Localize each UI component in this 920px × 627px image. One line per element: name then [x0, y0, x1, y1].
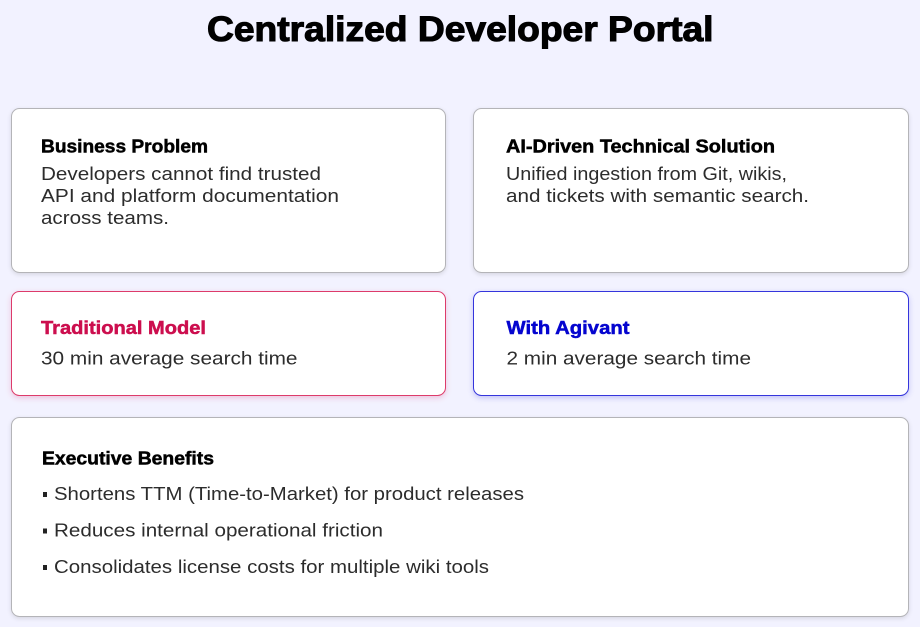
text: business problem description — [41, 163, 339, 228]
panel: executive benefits — [12, 418, 908, 616]
title: Centralized Developer Portal — [207, 10, 714, 49]
text: business problem description: API and platform documentation — [41, 185, 339, 206]
heading: executive benefits: Executive Benefits — [42, 447, 214, 468]
text: technical solution description — [506, 163, 809, 206]
text: technical solution description: and tickets with semantic search. — [506, 185, 809, 206]
heading: technical solution: AI-Driven Technical Solution — [506, 136, 775, 156]
panel: technical solution — [474, 108, 908, 272]
benefit: time to market: Shortens TTM (Time-to-Market) for product releases — [54, 483, 524, 504]
panel: with agivant — [474, 292, 908, 396]
text: business problem description: across teams. — [41, 207, 169, 228]
text: agivant search time: 2 min average search time — [506, 347, 751, 368]
text: traditional search time: 30 min average search time — [41, 347, 298, 368]
benefit: license costs: Consolidates license costs for multiple wiki tools — [54, 556, 489, 577]
benefit: operational friction: Reduces internal operational friction — [54, 520, 383, 540]
text: technical solution description: Unified ingestion from Git, wikis, — [506, 163, 787, 184]
heading: business problem: Business Problem — [41, 136, 208, 156]
heading: with agivant: With Agivant — [506, 317, 630, 338]
panel: traditional model — [12, 292, 446, 396]
panel: business problem — [12, 108, 446, 272]
heading: traditional model: Traditional Model — [41, 317, 206, 338]
text: business problem description: Developers cannot find trusted — [41, 163, 321, 184]
